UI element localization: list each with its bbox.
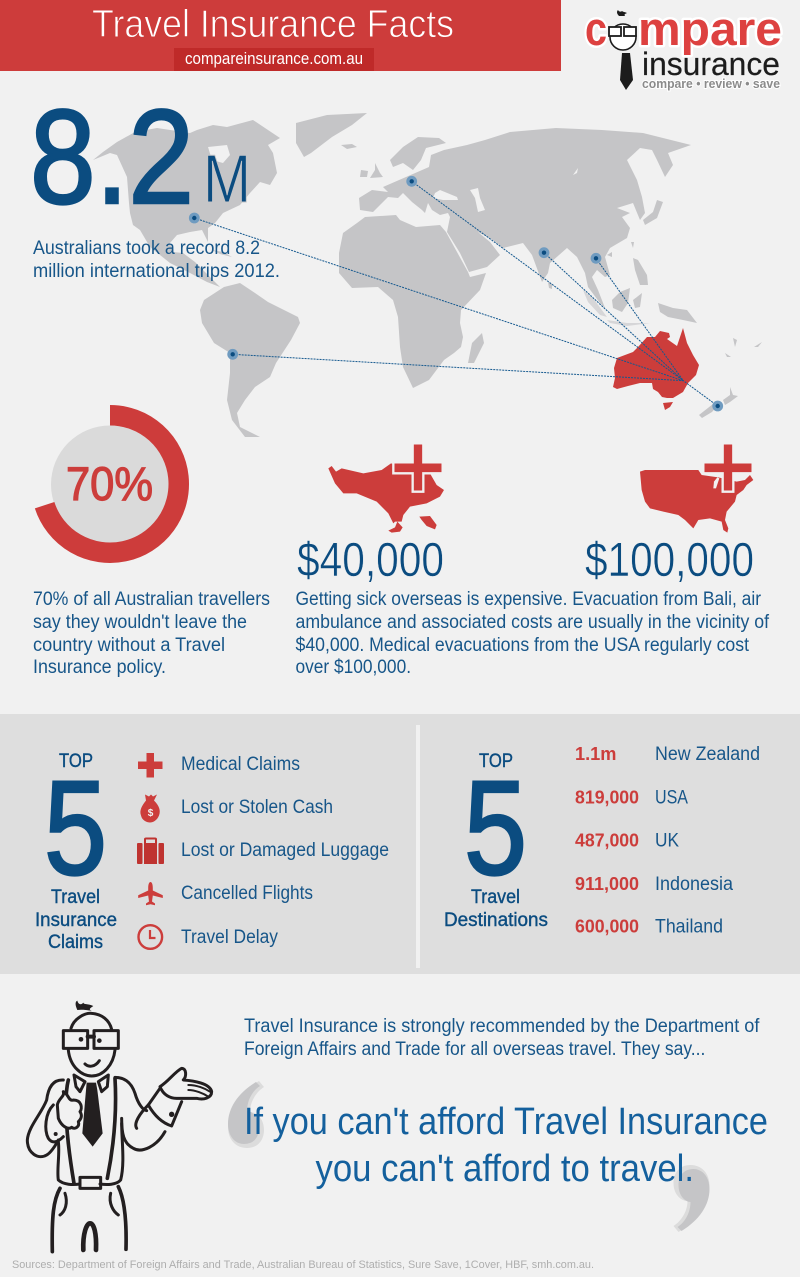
title: Travel Insurance Facts: [92, 3, 454, 46]
text: evacuation costs: $40,000. Medical evacuations from the USA regularly cost: [296, 635, 750, 656]
logo: compare insurance: mpare: [638, 2, 782, 55]
claim: medical: Medical Claims: [181, 754, 300, 775]
text: evacuation costs: over $100,000.: [296, 657, 411, 678]
pull quote: you can't afford to travel.: [316, 1148, 694, 1190]
claim: cancelled flights: Cancelled Flights: [181, 883, 313, 904]
panel: top 5 claims heading: TOP: [59, 750, 93, 772]
map: Sumatra and Java: [583, 290, 650, 326]
claim: travel delay: Travel Delay: [181, 927, 278, 948]
icon: opening quotation mark: [228, 1081, 264, 1148]
text: 70% description: [33, 589, 270, 678]
text: evacuation costs: ambulance and associated costs are usually in the vicinity of: [296, 612, 770, 633]
map: Africa: [339, 215, 486, 388]
map: Caribbean: [212, 250, 232, 257]
claim: lost cash: Lost or Stolen Cash: [181, 797, 333, 818]
map: Iceland: [341, 144, 357, 149]
map: Ireland: [360, 170, 368, 177]
text: trips description: million international trips 2012.: [33, 261, 280, 282]
destination list: [575, 743, 760, 938]
visitor numbers: 600,000: [575, 916, 639, 937]
big stat: 8.2M: M: [203, 141, 251, 217]
text: evacuation costs: [296, 589, 770, 678]
icon: luggage: [137, 838, 164, 864]
donut chart: 70%: 70%: [66, 457, 153, 510]
icon: Bali map with medical cross: [328, 443, 444, 533]
icon: clock: [138, 925, 162, 949]
map: South America: [200, 283, 300, 437]
visitor numbers: 1.1m: [575, 743, 616, 764]
cost: $40,000: $40,000: [297, 534, 444, 587]
panel: top 5 destinations heading: Travel: [471, 886, 520, 908]
country names: Indonesia: [655, 874, 733, 895]
country names: UK: [655, 831, 679, 852]
logo: compare insurance: [585, 2, 782, 91]
country names: New Zealand: [655, 744, 760, 765]
visitor numbers: [575, 743, 639, 937]
icon: medical cross: [138, 753, 162, 778]
world map: [93, 113, 762, 437]
map: Great Britain: [370, 163, 383, 178]
map: Japan: [643, 200, 663, 225]
text: evacuation costs: Getting sick overseas is expensive. Evacuation from Bali, air: [296, 589, 762, 610]
donut chart: 70%: [45, 415, 179, 553]
map: Black Sea and Caspian Sea: [433, 168, 578, 212]
map: Hudson Bay: [208, 145, 230, 163]
big stat: 8.2M: 8.2: [30, 83, 194, 232]
visitor numbers: 911,000: [575, 873, 639, 894]
country names: USA: [655, 787, 688, 808]
logo: compare insurance: insurance: [642, 46, 780, 82]
country names: Thailand: [655, 917, 723, 938]
cost: $100,000: $100,000: [585, 534, 754, 587]
panel: top 5 claims heading: Travel: [51, 886, 100, 908]
text: 70% description: say they wouldn't leave the: [33, 612, 247, 633]
text: trips description: Australians took a record 8.2: [33, 238, 260, 259]
header banner: [0, 0, 561, 71]
icon: money bag: [140, 794, 160, 822]
icon: USA map with medical cross: [640, 443, 753, 533]
map: Southeast Asian islands: [548, 242, 697, 323]
map: Greenland: [296, 113, 367, 157]
website address: compareinsurance.com.au: [185, 49, 363, 68]
map: Scandinavia: [390, 137, 446, 170]
icon: plane: [138, 882, 163, 905]
map: Australia highlighted: [613, 328, 699, 410]
illustration: man with glasses and tie: [27, 1001, 212, 1252]
map: Eurasia: [359, 128, 691, 308]
map: North America: [93, 120, 280, 287]
destination markers: [189, 176, 723, 411]
icon: money bag: $: [148, 808, 154, 819]
logo: compare insurance: c: [585, 2, 607, 55]
text: 70% description: country without a Travel: [33, 635, 225, 656]
panel: top 5 destinations heading: 5: [464, 754, 527, 903]
route lines to Australia: [194, 181, 718, 406]
panel: top 5 destinations heading: TOP: [479, 750, 513, 772]
map: Pacific islands and New Zealand: [699, 338, 762, 418]
panel: top 5 claims heading: Insurance: [35, 909, 117, 931]
text: 70% description: 70% of all Australian travellers: [33, 589, 270, 610]
panel: top 5 destinations heading: [444, 750, 548, 931]
country names: [655, 744, 760, 938]
sources footnote: Sources: Department of Foreign Affairs and Trade, Australian Bureau of Statistics, Sure Save, 1Cover, HBF, smh.com.au.: [12, 1259, 594, 1271]
text: 70% description: Insurance policy.: [33, 657, 166, 678]
pull quote: [244, 1101, 768, 1190]
panel: top 5 claims heading: 5: [44, 754, 107, 903]
claim: lost luggage: Lost or Damaged Luggage: [181, 840, 389, 861]
panel: top 5 claims heading: Claims: [48, 931, 103, 953]
text: recommendation: Travel Insurance is strongly recommended by the Department of: [244, 1016, 760, 1037]
logo: compare insurance: compare • review • save: [642, 76, 780, 91]
icon: closing quotation mark: [674, 1165, 710, 1232]
text: trips description: [33, 238, 280, 282]
panel: top 5 band: [0, 714, 800, 974]
visitor numbers: 487,000: [575, 830, 639, 851]
map: Madagascar: [468, 333, 484, 363]
visitor numbers: 819,000: [575, 786, 639, 807]
panel: top 5 claims heading: [35, 750, 117, 953]
text: recommendation: Foreign Affairs and Trade for all overseas travel. They say...: [244, 1039, 705, 1060]
panel: top 5 destinations heading: Destinations: [444, 909, 548, 931]
text: recommendation: [244, 1016, 760, 1060]
